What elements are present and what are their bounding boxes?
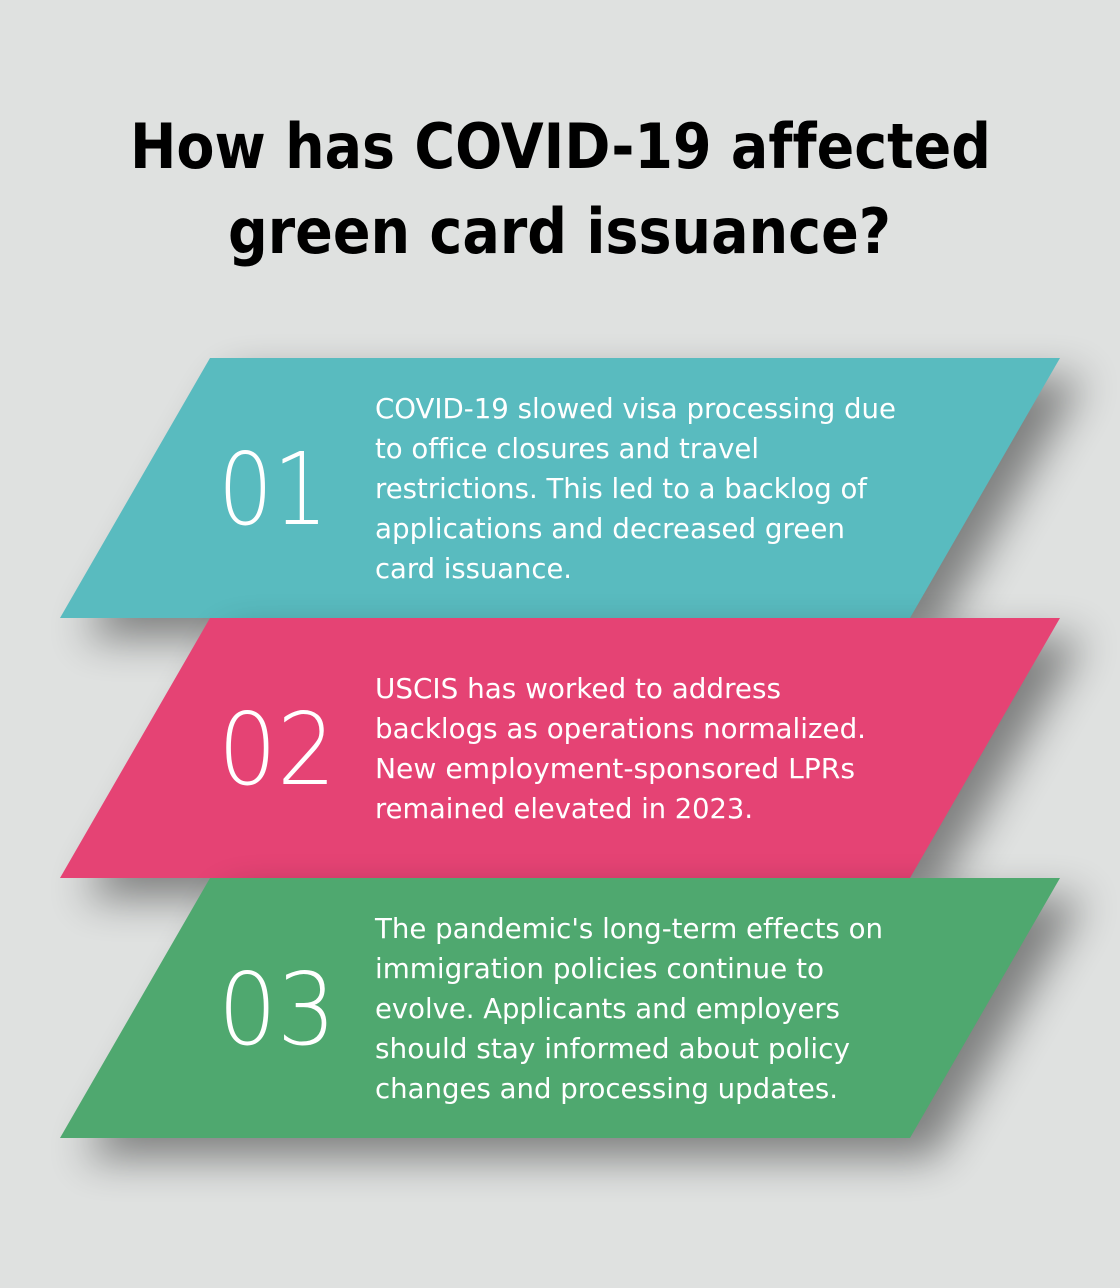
text block 02: remained elevated in 2023. xyxy=(375,792,753,825)
text block 02: backlogs as operations normalized. xyxy=(375,712,866,745)
text block 01: COVID-19 slowed visa processing due xyxy=(375,392,896,425)
text block 03: The pandemic's long-term effects on xyxy=(374,912,883,945)
number 01: 01 xyxy=(218,431,328,548)
text block 03: should stay informed about policy xyxy=(375,1032,850,1065)
text block 01 xyxy=(375,392,896,585)
text block 03: evolve. Applicants and employers xyxy=(375,992,840,1025)
text block 03 xyxy=(374,912,883,1105)
text block 01: card issuance. xyxy=(375,552,572,585)
text block 01: to office closures and travel xyxy=(375,432,759,465)
panel: step 01 xyxy=(60,358,1084,638)
panel: step 03 xyxy=(60,878,1084,1158)
title xyxy=(130,110,991,268)
text block 02: USCIS has worked to address xyxy=(375,672,781,705)
number 02: 02 xyxy=(218,691,336,808)
text block 02: New employment-sponsored LPRs xyxy=(375,752,855,785)
number 03: 03 xyxy=(218,951,336,1068)
title: green card issuance? xyxy=(228,195,891,268)
text block 03: immigration policies continue to xyxy=(375,952,824,985)
text block 01: restrictions. This led to a backlog of xyxy=(375,472,868,505)
text block 02 xyxy=(375,672,866,825)
text block 01: applications and decreased green xyxy=(375,512,845,545)
text block 03: changes and processing updates. xyxy=(375,1072,838,1105)
panel: step 02 xyxy=(60,618,1084,898)
title: How has COVID-19 affected xyxy=(130,110,991,183)
